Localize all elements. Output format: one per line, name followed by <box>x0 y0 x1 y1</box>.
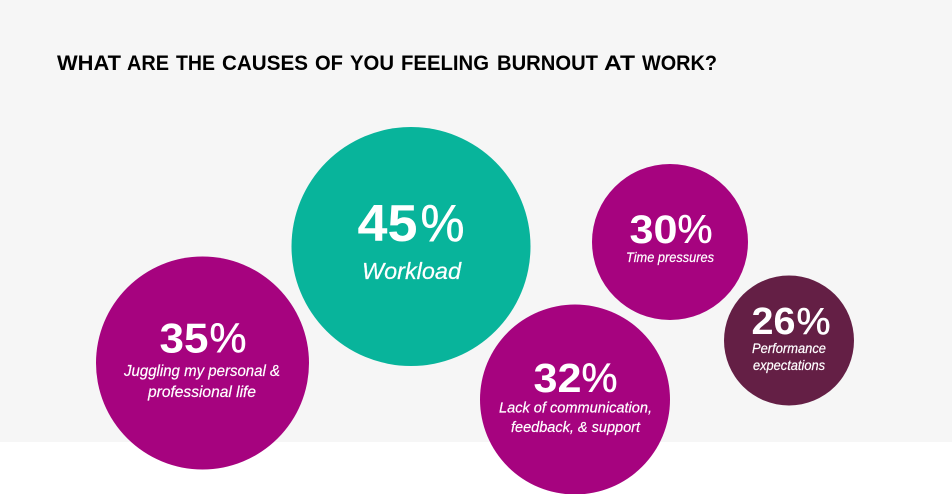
bubble: 45% workload: % <box>420 195 464 253</box>
bubble: 26% performance expectations: 26 <box>752 301 796 343</box>
bubble: 32% lack of communication: % <box>582 355 618 401</box>
title: OF <box>315 52 343 75</box>
bubble: 32% lack of communication: Lack of communication, <box>499 400 652 416</box>
bubble: 30% time pressures <box>592 164 748 320</box>
bubble: 45% workload: Workload <box>362 258 462 284</box>
bubble: 35% juggling personal and professional life <box>96 256 309 470</box>
bubble: 35% juggling personal and professional life: 35 <box>160 314 208 362</box>
bubble: 32% lack of communication <box>480 304 670 494</box>
bubble: 35% juggling personal and professional life: Juggling my personal & <box>123 363 280 380</box>
bubble: 26% performance expectations: Performance <box>752 341 826 356</box>
title: AT <box>604 52 635 75</box>
bubble: 45% workload <box>292 127 530 366</box>
title: WORK? <box>642 52 717 75</box>
bubble: 35% juggling personal and professional life: % <box>210 314 246 362</box>
title: BURNOUT <box>497 52 598 75</box>
title: WHAT <box>57 52 121 75</box>
title: ARE <box>127 52 169 75</box>
bubble: 30% time pressures: Time pressures <box>626 250 714 265</box>
bubble: 32% lack of communication: 32 <box>534 355 582 401</box>
bubble: 26% performance expectations: % <box>796 301 830 343</box>
title: FEELING <box>401 52 489 75</box>
title: THE <box>176 52 215 75</box>
bubble: 30% time pressures: % <box>678 208 712 252</box>
bubble: 26% performance expectations <box>724 276 854 406</box>
bubble: 30% time pressures: 30 <box>630 208 678 252</box>
bubble: 45% workload: 45 <box>358 195 418 253</box>
bubble: 26% performance expectations: expectations <box>753 358 825 373</box>
bubble: 35% juggling personal and professional life: professional life <box>147 384 256 401</box>
title <box>57 52 717 75</box>
title: CAUSES <box>222 52 308 75</box>
title: YOU <box>350 52 394 75</box>
bubble: 32% lack of communication: feedback, & support <box>511 419 641 436</box>
